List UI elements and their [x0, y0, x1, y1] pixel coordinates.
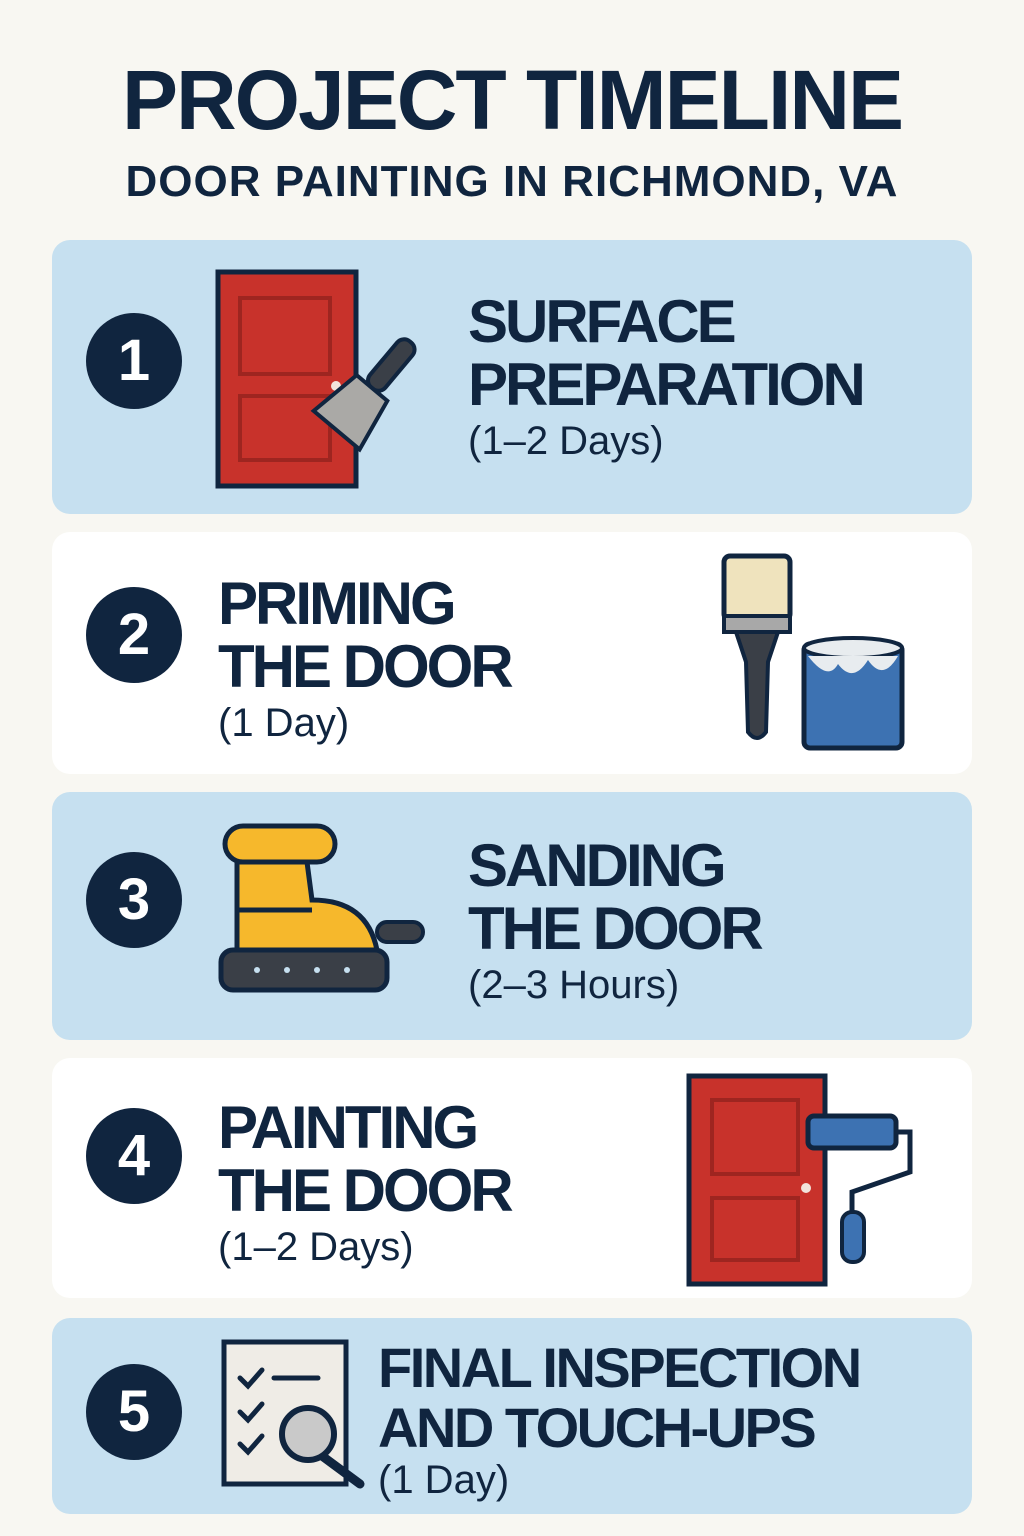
panel: step 4 — [52, 1058, 972, 1298]
heading 5 — [378, 1336, 860, 1502]
number 3: 3 — [118, 867, 150, 932]
number 5 — [86, 1364, 182, 1460]
icon: door with roller — [686, 1074, 912, 1286]
number 2: 2 — [118, 602, 150, 667]
heading 2: (1 Day) — [218, 701, 349, 745]
heading 5: (1 Day) — [378, 1458, 509, 1502]
heading 1: PREPARATION — [468, 351, 863, 418]
number 1: 1 — [118, 328, 150, 393]
heading 4 — [218, 1094, 512, 1269]
icon: door with scraper — [216, 270, 417, 488]
icon: brush and paint can — [722, 554, 904, 750]
number 2 — [86, 587, 182, 683]
panel: step 5 — [52, 1318, 972, 1514]
heading 2: THE DOOR — [218, 633, 511, 700]
heading 1 — [468, 288, 863, 463]
panel: step 3 — [52, 792, 972, 1040]
heading 2: PRIMING — [218, 570, 454, 637]
panel: step 1 — [52, 240, 972, 514]
heading 2 — [218, 570, 512, 745]
panel: step 2 — [52, 532, 972, 774]
number 3 — [86, 852, 182, 948]
heading 3: (2–3 Hours) — [468, 963, 679, 1007]
heading 5: AND TOUCH-UPS — [378, 1396, 814, 1459]
subtitle: DOOR PAINTING IN RICHMOND, VA — [126, 157, 898, 206]
heading 1: (1–2 Days) — [468, 419, 664, 463]
heading 3: SANDING — [468, 832, 724, 899]
icon: sander — [218, 824, 425, 992]
number 4 — [86, 1108, 182, 1204]
title: PROJECT TIMELINE — [122, 53, 902, 147]
number 4: 4 — [118, 1123, 150, 1188]
number 5: 5 — [118, 1379, 150, 1444]
heading 4: PAINTING — [218, 1094, 476, 1161]
heading 1: SURFACE — [468, 288, 734, 355]
heading 3: THE DOOR — [468, 895, 761, 962]
heading 5: FINAL INSPECTION — [378, 1336, 860, 1399]
heading 3 — [468, 832, 762, 1007]
icon: checklist with magnifier — [222, 1340, 364, 1488]
heading 4: THE DOOR — [218, 1157, 511, 1224]
heading 4: (1–2 Days) — [218, 1225, 414, 1269]
number 1 — [86, 313, 182, 409]
